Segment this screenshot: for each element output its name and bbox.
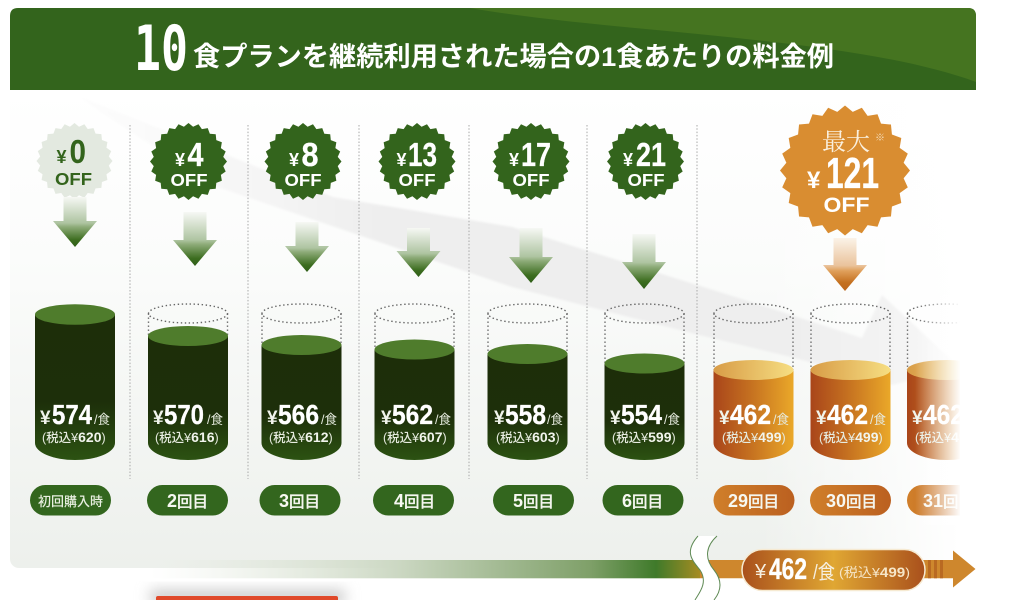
timeline arrow: orange section xyxy=(700,550,976,588)
pill: 4th: 4回目 xyxy=(394,491,435,511)
pill: 29th xyxy=(714,485,794,516)
pill: first purchase: 初回購入時 xyxy=(38,494,103,509)
cylinder: 462 yen: (税込¥499) xyxy=(722,429,786,445)
cylinder: 562 yen: ¥ xyxy=(381,408,392,429)
badge: 8 yen off: 8 xyxy=(302,136,318,173)
column: 5th xyxy=(488,123,574,516)
cut-off red button with shadow xyxy=(150,590,345,600)
badge: maximum 121 yen off xyxy=(780,106,910,236)
cylinder: 566 yen xyxy=(262,335,342,460)
right edge white fade xyxy=(915,295,1024,525)
pill: 2nd: 2回目 xyxy=(167,491,208,511)
badge: maximum 121 yen off: OFF xyxy=(824,194,870,217)
cylinder: 562 yen xyxy=(374,340,454,460)
badge: 0 yen off xyxy=(36,123,112,199)
cylinder: 462 yen: ¥ xyxy=(816,408,827,429)
pill: 6th: 6回目 xyxy=(622,491,663,511)
badge: maximum 121 yen off: 最大 xyxy=(822,129,870,156)
badge: 4 yen off: 4 xyxy=(188,136,204,173)
arrow down: orange xyxy=(823,238,867,291)
column: 29th xyxy=(714,304,794,516)
cylinder: 558 yen xyxy=(488,344,568,460)
column: 2nd xyxy=(147,123,228,516)
dotted glass outline xyxy=(375,304,454,349)
diagonal grey arrow swoosh xyxy=(80,97,960,385)
badge: 17 yen off: 17 xyxy=(521,136,551,173)
price pill: 462 yen per meal: /食 xyxy=(813,561,835,584)
badge: 21 yen off: OFF xyxy=(628,170,665,190)
dotted glass outline xyxy=(811,304,890,370)
column: 6th xyxy=(602,123,684,516)
cylinder: 562 yen: (税込¥607) xyxy=(383,429,447,445)
cylinder: 558 yen: 558 xyxy=(505,399,546,430)
cylinder: 558 yen: (税込¥603) xyxy=(496,429,560,445)
badge: 8 yen off: ¥ xyxy=(289,150,299,170)
arrow down xyxy=(509,228,553,283)
dotted glass outline xyxy=(908,304,986,370)
badge: 13 yen off: OFF xyxy=(398,170,436,190)
cylinder: 462 yen: /食 xyxy=(773,412,789,427)
timeline break mark xyxy=(690,536,720,600)
price pill: 462 yen per meal: 462 xyxy=(769,553,807,586)
cylinder: 566 yen: /食 xyxy=(321,412,337,427)
cylinder: 554 yen: (税込¥599) xyxy=(612,429,676,445)
cylinder: 462 yen xyxy=(907,360,987,460)
pill: 30th: 30回目 xyxy=(826,491,877,511)
cylinder: 554 yen: 554 xyxy=(621,399,662,430)
pill: first purchase xyxy=(30,485,111,516)
pill: 3rd: 3回目 xyxy=(279,491,320,511)
badge: 8 yen off: OFF xyxy=(284,170,322,190)
cylinder: 558 yen: /食 xyxy=(547,412,563,427)
badge: 21 yen off: ¥ xyxy=(623,150,633,170)
column dividers xyxy=(130,125,697,479)
cylinder: 562 yen: /食 xyxy=(435,412,451,427)
cylinder: 566 yen: (税込¥612) xyxy=(269,429,333,445)
column: 31st, faded xyxy=(907,304,988,516)
badge: 0 yen off: 0 xyxy=(70,133,86,170)
dotted glass outline xyxy=(714,304,793,370)
cylinder: 462 yen: /食 xyxy=(966,412,982,427)
arrow down xyxy=(173,212,217,266)
cylinder: 570 yen: 570 xyxy=(164,399,204,430)
pill: 30th xyxy=(810,485,891,516)
price pill: 462 yen per meal: ¥ xyxy=(754,561,767,583)
background panel xyxy=(10,90,990,570)
badge: 21 yen off xyxy=(607,123,684,200)
badge: 13 yen off: 13 xyxy=(408,136,437,173)
pill: 5th: 5回目 xyxy=(513,491,554,511)
badge: maximum 121 yen off: ¥ xyxy=(807,167,821,194)
arrow down xyxy=(285,222,329,272)
cylinder: 554 yen: ¥ xyxy=(610,408,621,429)
cylinder: 462 yen: ¥ xyxy=(912,408,923,429)
badge: 4 yen off: OFF xyxy=(170,170,208,190)
badge: 17 yen off: ¥ xyxy=(509,150,519,170)
badge: 4 yen off: ¥ xyxy=(175,150,185,170)
pill: 31st: 31回目 xyxy=(923,491,974,511)
badge: 21 yen off: 21 xyxy=(636,136,666,173)
column: 4th xyxy=(373,123,456,516)
cylinder: 574 yen: 574 xyxy=(52,399,92,430)
column: first purchase xyxy=(30,123,115,516)
cylinder: 462 yen xyxy=(810,360,890,460)
cylinder: 558 yen: ¥ xyxy=(494,408,505,429)
badge: 8 yen off xyxy=(264,123,342,200)
cylinder: 462 yen: 462 xyxy=(827,399,868,430)
pill: 5th xyxy=(493,485,574,516)
cylinder: 462 yen: (税込¥499) xyxy=(819,429,883,445)
pill: 4th xyxy=(373,485,454,516)
title banner xyxy=(10,8,976,90)
cylinder: 570 yen xyxy=(148,326,228,460)
badge: maximum 121 yen off: 121 xyxy=(826,149,879,198)
cylinder: 562 yen: 562 xyxy=(392,399,433,430)
badge: 17 yen off: OFF xyxy=(512,170,550,190)
dotted glass outline xyxy=(148,304,228,336)
badge: maximum 121 yen off: ※ xyxy=(875,133,885,144)
column: 30th xyxy=(810,304,891,516)
price pill: 462 yen per meal xyxy=(742,550,925,590)
cylinder: 462 yen: 462 xyxy=(730,399,771,430)
badge: 13 yen off: ¥ xyxy=(396,150,407,170)
badge: 0 yen off: ¥ xyxy=(56,147,67,167)
dotted glass outline xyxy=(488,304,567,354)
cylinder: 570 yen: ¥ xyxy=(153,408,164,429)
cylinder: 554 yen xyxy=(604,354,684,460)
cylinder: 462 yen: ¥ xyxy=(719,408,730,429)
cylinder: 570 yen: /食 xyxy=(207,412,223,427)
pill: 29th: 29回目 xyxy=(728,491,779,511)
arrow down xyxy=(53,197,97,247)
pill: 31st xyxy=(907,485,988,516)
cylinder: 554 yen: /食 xyxy=(664,412,680,427)
cylinder: 566 yen: 566 xyxy=(278,399,319,430)
dotted glass outline xyxy=(605,304,684,363)
cylinder: 462 yen: 462 xyxy=(923,399,964,430)
cylinder: 574 yen: ¥ xyxy=(40,408,51,429)
cylinder: 462 yen: (税込¥499) xyxy=(915,429,979,445)
badge: 17 yen off xyxy=(492,123,570,200)
pill: 6th xyxy=(602,485,684,516)
cylinder: 462 yen: /食 xyxy=(870,412,886,427)
badge: 13 yen off xyxy=(378,123,456,200)
cylinder: 570 yen: (税込¥616) xyxy=(155,429,219,445)
badge: 0 yen off: OFF xyxy=(55,169,92,189)
price pill: 462 yen per meal: (税込¥499) xyxy=(839,564,910,580)
pill: 3rd xyxy=(260,485,340,516)
badge: 4 yen off xyxy=(150,123,227,200)
cylinder: 574 yen: (税込¥620) xyxy=(42,429,106,445)
timeline bar: green section xyxy=(150,560,700,578)
cylinder: 462 yen xyxy=(714,360,794,460)
pill: 2nd xyxy=(147,485,228,516)
arrow down xyxy=(396,228,440,277)
dotted glass outline xyxy=(262,304,341,345)
column: 3rd xyxy=(260,123,342,516)
cylinder: 566 yen: ¥ xyxy=(267,408,278,429)
cylinder: 574 yen xyxy=(35,304,115,460)
cylinder: 574 yen: /食 xyxy=(94,412,110,427)
title text: 食プランを継続利用された場合の1食あたりの料金例 xyxy=(193,42,834,72)
title number: 10 xyxy=(134,12,188,85)
arrow down xyxy=(622,234,666,289)
